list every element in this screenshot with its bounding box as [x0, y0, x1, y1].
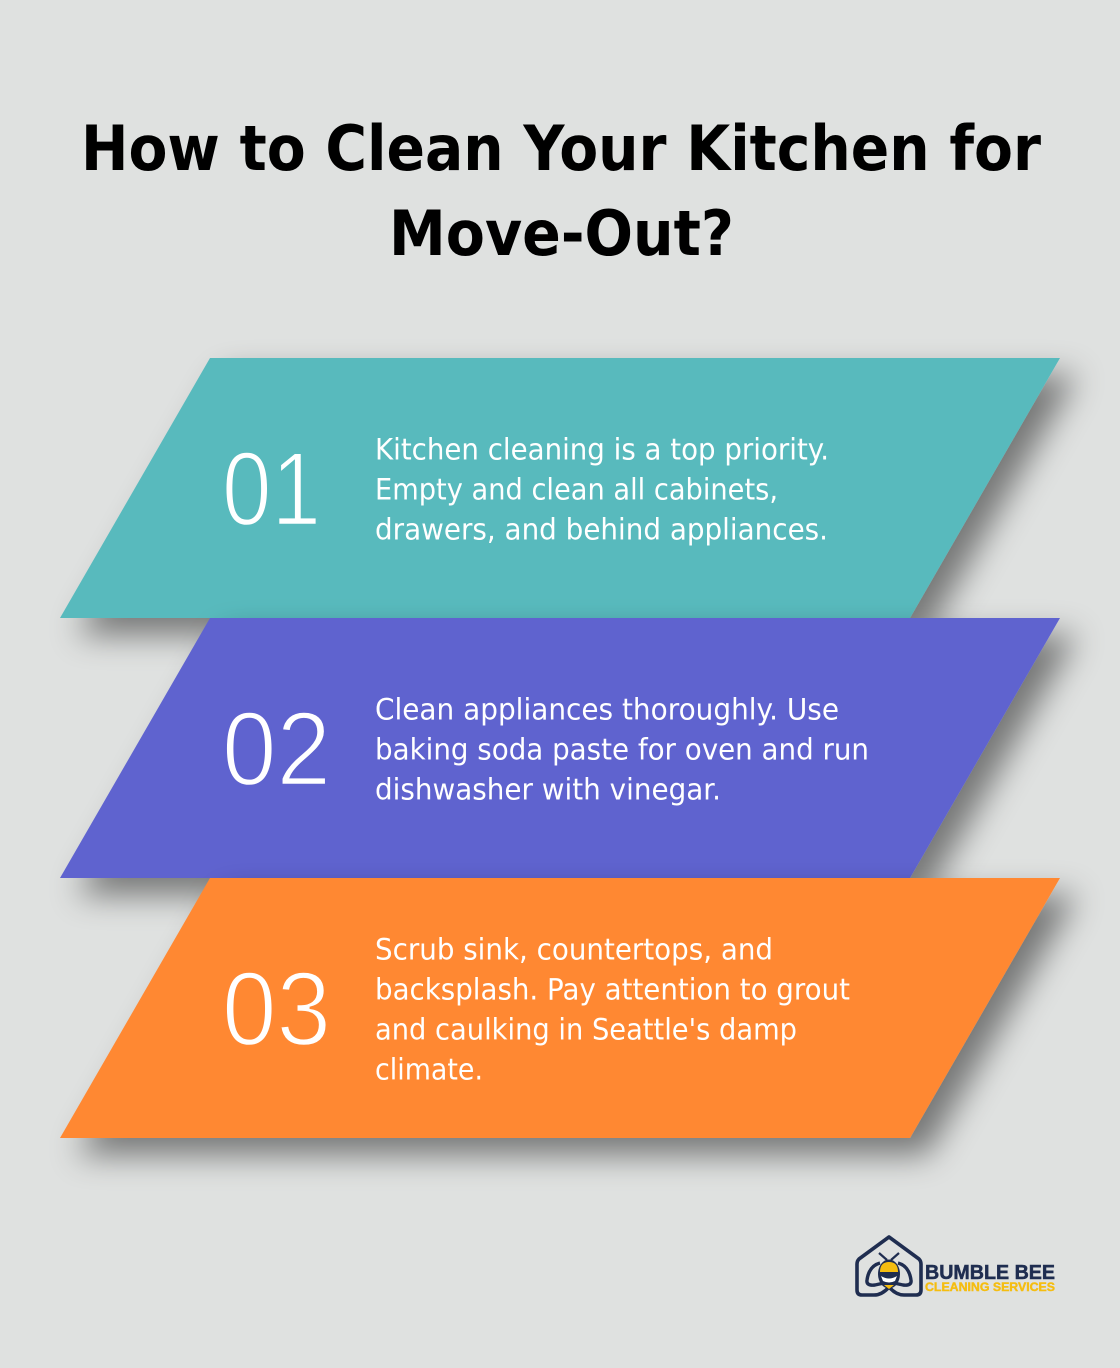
step 02 description: dishwasher with vinegar.: [375, 772, 721, 806]
step 03 description: [375, 932, 850, 1086]
logo wordmark: BUMBLE BEE: [925, 1262, 1055, 1284]
number 03: 03: [222, 951, 331, 1068]
panel: step 02: [60, 618, 1060, 878]
step 02 description: baking soda paste for oven and run: [375, 732, 869, 766]
teal parallelogram band: [60, 358, 1060, 618]
panel: step 03: [60, 878, 1060, 1138]
panel: step 01: [60, 358, 1060, 618]
purple parallelogram band: [60, 618, 1060, 878]
number 02: 02: [222, 691, 331, 808]
orange parallelogram band: [60, 878, 1060, 1138]
number 01: 01: [222, 431, 321, 548]
step 03 description: Scrub sink, countertops, and: [375, 932, 773, 966]
step 03 description: climate.: [375, 1052, 483, 1086]
step 03 description: backsplash. Pay attention to grout: [375, 972, 850, 1006]
title: How to Clean Your Kitchen for: [81, 112, 1041, 185]
logo: [857, 1237, 1055, 1295]
step 02 description: Clean appliances thoroughly. Use: [375, 692, 839, 726]
step 02 description: [375, 692, 869, 806]
step 01 description: [375, 432, 829, 546]
icon: bee in house: [857, 1237, 921, 1295]
title: Move-Out?: [389, 197, 734, 270]
step 01 description: drawers, and behind appliances.: [375, 512, 828, 546]
step 01 description: Kitchen cleaning is a top priority.: [375, 432, 829, 466]
step 01 description: Empty and clean all cabinets,: [375, 472, 778, 506]
step 03 description: and caulking in Seattle's damp: [375, 1012, 797, 1046]
title: [81, 112, 1041, 270]
logo tagline: CLEANING SERVICES: [925, 1282, 1055, 1294]
